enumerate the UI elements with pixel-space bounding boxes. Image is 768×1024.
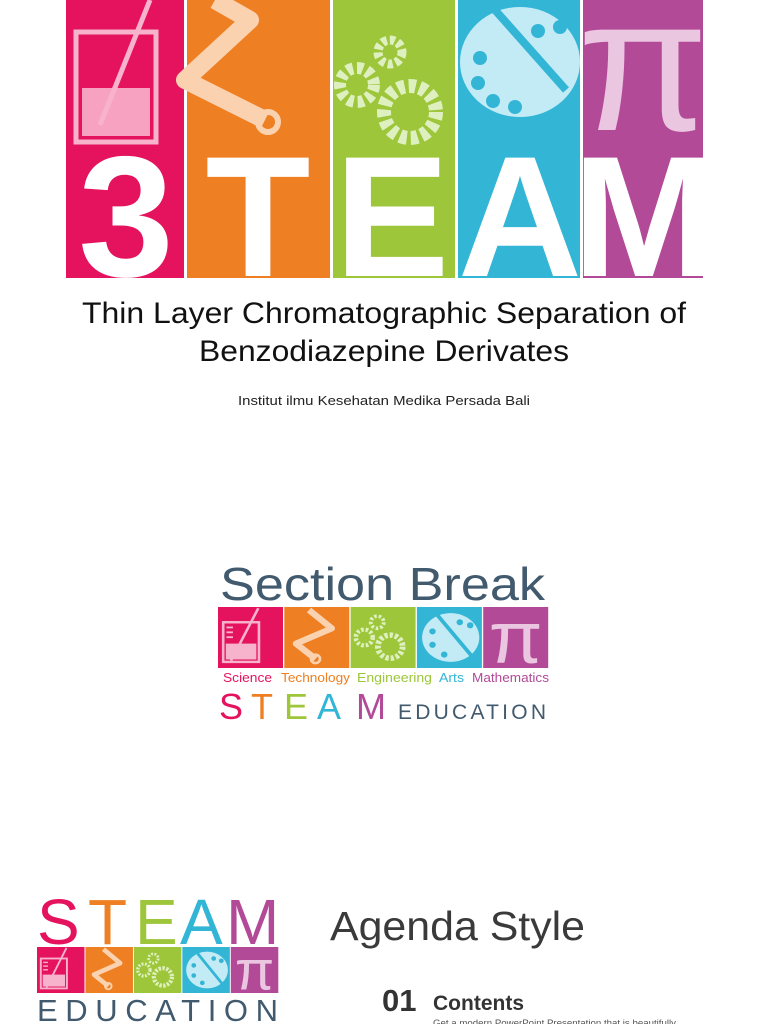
labels row: Engineering — [357, 671, 432, 685]
banner letters 3TEAM: M — [572, 121, 716, 313]
labels row: Mathematics — [472, 671, 549, 685]
banner letters 3TEAM: T — [205, 121, 311, 313]
icon: robot arm — [185, 0, 265, 120]
icon: gears — [340, 40, 436, 138]
bottom logo: STEAM EDUCATION: A — [180, 886, 223, 958]
bottom logo: STEAM EDUCATION: S — [37, 886, 80, 958]
agenda item 01 — [382, 983, 676, 1024]
banner letters 3TEAM: A — [458, 121, 582, 313]
banner letters 3TEAM: E — [335, 121, 449, 313]
title: Benzodiazepine Derivates — [199, 335, 569, 368]
STEAM EDUCATION: T — [251, 686, 273, 727]
heading: Section Break: Section Break — [220, 558, 546, 610]
icon strip — [218, 598, 548, 680]
banner letters 3TEAM: 3 — [78, 121, 174, 313]
subtitle: institution: Institut ilmu Kesehatan Medika Persada Bali — [238, 393, 530, 408]
STEAM EDUCATION: E — [284, 686, 308, 727]
title — [82, 297, 687, 368]
icon: beaker — [76, 0, 156, 142]
STEAM EDUCATION — [219, 686, 546, 727]
labels row: Science — [223, 671, 272, 685]
title: Thin Layer Chromatographic Separation of — [82, 297, 687, 330]
bottom logo: STEAM EDUCATION: T — [88, 886, 127, 958]
labels row: Technology — [281, 671, 351, 685]
top banner: STEAM logo — [66, 0, 716, 313]
section break block — [218, 558, 549, 727]
icon: palette — [460, 7, 580, 117]
STEAM EDUCATION: EDUCATION — [398, 701, 546, 724]
labels row: Arts — [439, 671, 464, 685]
bottom logo: STEAM EDUCATION: E — [135, 886, 178, 958]
STEAM EDUCATION: S — [219, 686, 243, 727]
heading: Agenda Style: Agenda Style — [330, 903, 585, 949]
bottom logo: STEAM EDUCATION — [37, 886, 279, 1024]
STEAM EDUCATION: A — [317, 686, 341, 727]
agenda item 01: Contents — [433, 992, 524, 1015]
labels row — [223, 671, 549, 685]
banner letters 3TEAM — [78, 121, 716, 313]
bottom logo: STEAM EDUCATION: M — [226, 886, 279, 958]
STEAM EDUCATION: M — [356, 686, 386, 727]
agenda item 01: 01 — [382, 983, 416, 1018]
